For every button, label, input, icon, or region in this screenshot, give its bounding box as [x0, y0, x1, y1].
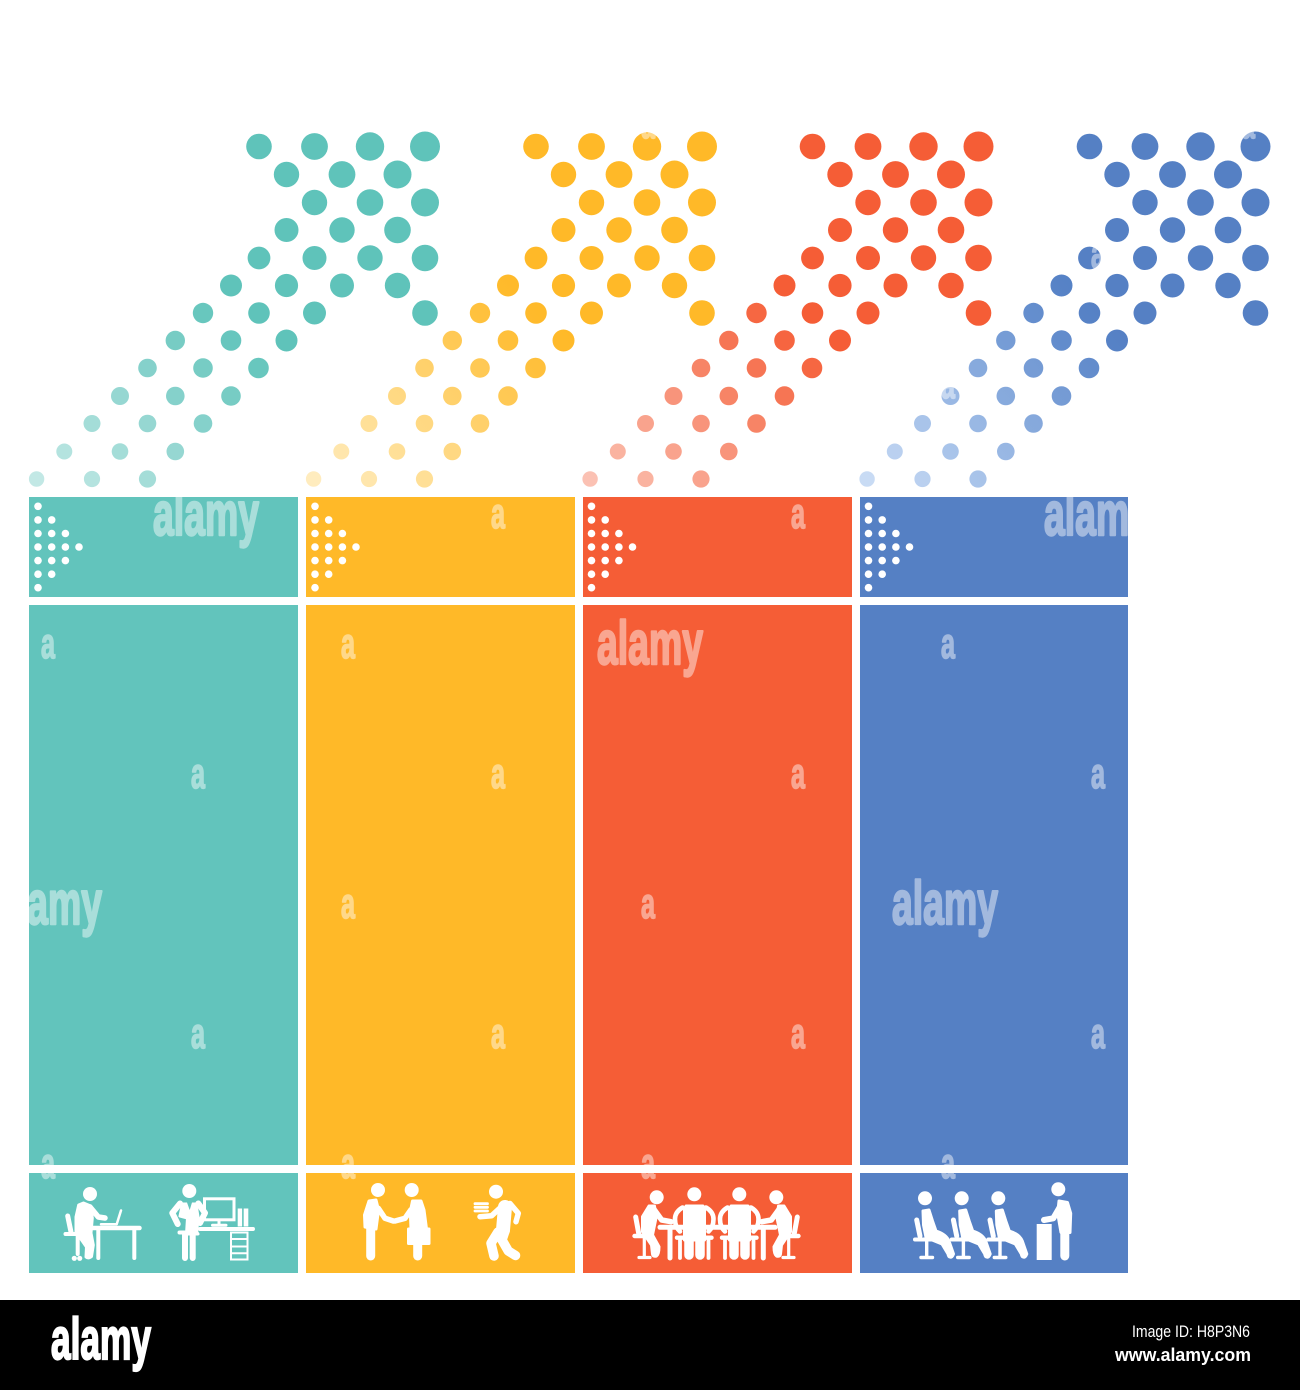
header panel: red	[583, 497, 852, 597]
body panel: teal	[29, 605, 298, 1165]
watermarks: a	[641, 1140, 656, 1188]
arrow: yellow dots	[306, 132, 717, 488]
footer panel: yellow	[306, 1173, 575, 1273]
icon: dotted triangle blue	[865, 502, 913, 592]
column: teal	[29, 497, 298, 1273]
icon: three people seated waiting	[915, 1191, 1027, 1258]
icon: dotted triangle red	[588, 502, 636, 592]
watermarks: a	[941, 360, 956, 408]
icon: person walking with books	[475, 1185, 518, 1256]
icon: dotted triangle yellow	[311, 502, 360, 592]
footer panel: red	[583, 1173, 852, 1273]
watermarks: a	[491, 750, 506, 798]
watermarks: a	[791, 490, 806, 538]
watermarks: a	[491, 1010, 506, 1058]
watermarks: alamy	[0, 869, 102, 937]
watermarks: a	[1241, 100, 1256, 148]
watermarks: a	[41, 1140, 56, 1188]
watermarks: a	[341, 1140, 356, 1188]
watermarks: a	[641, 100, 656, 148]
column: red	[583, 497, 852, 1273]
website: www.alamy.com	[1114, 1345, 1251, 1365]
body panel: yellow	[306, 605, 575, 1165]
footer panel: teal	[29, 1173, 298, 1273]
watermarks: alamy	[1044, 480, 1150, 548]
arrow: blue dots	[859, 132, 1270, 488]
watermarks: a	[1091, 750, 1106, 798]
watermarks: a	[941, 620, 956, 668]
image id: Image ID: H8P3N6	[1132, 1322, 1250, 1341]
watermarks: alamy	[153, 480, 259, 548]
icon: four people at a meeting table	[634, 1187, 798, 1258]
icon: woman at office desk with computer	[172, 1184, 253, 1260]
watermarks: alamy	[892, 869, 998, 937]
body panel: blue	[860, 605, 1128, 1165]
footer band	[0, 1300, 1300, 1390]
watermarks: a	[191, 1010, 206, 1058]
watermarks: a	[491, 490, 506, 538]
column: yellow	[306, 497, 575, 1273]
watermarks: a	[341, 620, 356, 668]
icon: person working on laptop	[66, 1187, 140, 1261]
watermarks: a	[41, 620, 56, 668]
watermarks: a	[941, 1140, 956, 1188]
logo: alamy: alamy	[51, 1307, 151, 1372]
watermarks: a	[791, 1010, 806, 1058]
arrow: red dots	[582, 132, 994, 488]
header panel: blue	[860, 497, 1128, 597]
watermarks: a	[1091, 1010, 1106, 1058]
watermarks: a	[191, 750, 206, 798]
icon: person standing at podium	[1037, 1182, 1071, 1260]
arrow: teal dots	[29, 132, 440, 488]
body panel: red	[583, 605, 852, 1165]
watermarks: a	[791, 750, 806, 798]
footer panel: blue	[860, 1173, 1128, 1273]
watermarks: a	[1091, 230, 1106, 278]
watermarks: alamy	[597, 609, 703, 677]
column: blue	[860, 497, 1128, 1273]
icon: two people shaking hands	[364, 1183, 429, 1256]
icon: dotted triangle teal	[34, 502, 83, 592]
watermarks: a	[341, 880, 356, 928]
watermarks	[0, 100, 1256, 1188]
header panel: teal	[29, 497, 298, 597]
header panel: yellow	[306, 497, 575, 597]
watermarks: a	[641, 880, 656, 928]
